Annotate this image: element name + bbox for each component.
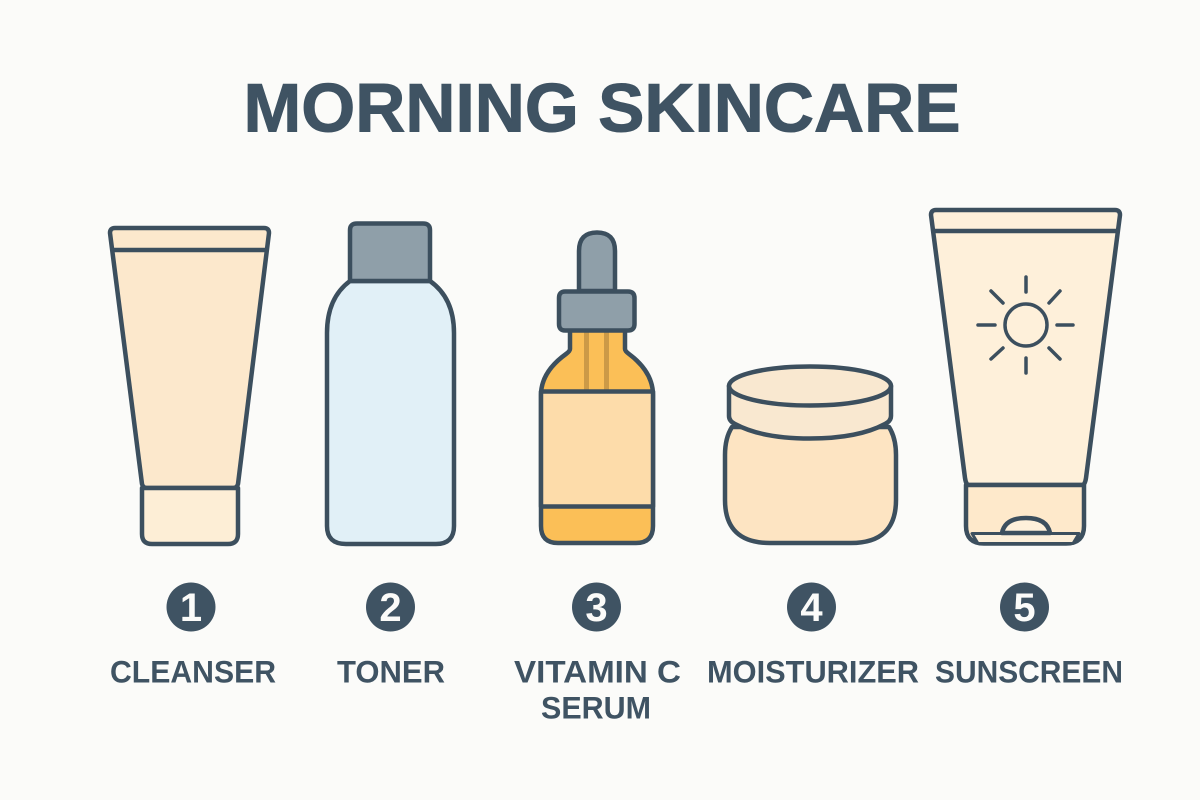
step 5 badge: 5 [1013, 586, 1036, 630]
label: toner: TONER [337, 654, 445, 690]
title: MORNING SKINCARE [244, 70, 960, 146]
icon: cleanser tube [110, 228, 269, 544]
step 1 badge [166, 582, 216, 632]
icon: sunscreen tube [931, 210, 1120, 544]
step 5 badge [1000, 582, 1049, 632]
step 1 badge: 1 [180, 586, 202, 630]
label: vitamin C serum: VITAMIN C [514, 654, 681, 690]
icon: vitamin C serum bottle [541, 232, 653, 543]
label: sunscreen: SUNSCREEN [935, 654, 1123, 690]
step 2 badge: 2 [379, 586, 402, 630]
icon: moisturizer jar [725, 366, 896, 543]
icon: toner bottle [327, 224, 454, 544]
step 3 badge [572, 582, 621, 632]
icon: sun symbol [978, 277, 1073, 373]
step 3 badge: 3 [585, 586, 608, 630]
label: moisturizer: MOISTURIZER [707, 654, 919, 690]
label: cleanser: CLEANSER [110, 654, 276, 690]
label: vitamin C serum [514, 654, 681, 726]
step 2 badge [366, 582, 415, 632]
step 4 badge [787, 582, 836, 632]
step 4 badge: 4 [800, 586, 823, 630]
label: vitamin C serum: SERUM [541, 690, 651, 726]
